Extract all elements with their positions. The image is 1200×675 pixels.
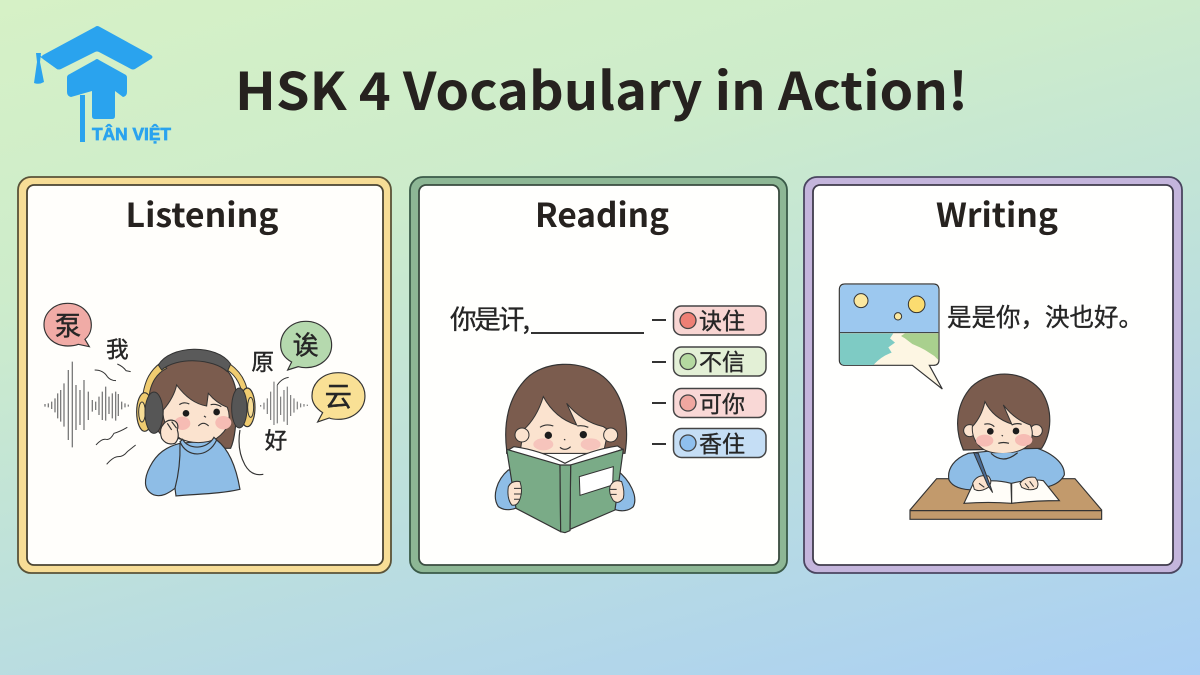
cheeks — [174, 417, 190, 430]
bubble: yellow — [312, 373, 365, 422]
ears — [515, 428, 529, 442]
panel: listening — [18, 177, 391, 573]
hands — [508, 481, 522, 505]
floating characters: 我 — [106, 332, 129, 365]
headphones — [143, 363, 248, 397]
sweater — [145, 440, 240, 496]
collar — [180, 437, 217, 454]
logo wordmark: TÂN VIỆT — [92, 123, 171, 144]
title: HSK 4 Vocabulary in Action! — [235, 50, 968, 125]
hair back — [148, 356, 237, 448]
sound wave right — [261, 382, 307, 425]
table — [910, 479, 1102, 519]
book label — [579, 467, 613, 495]
bubble: red — [44, 303, 91, 347]
option: red — [652, 302, 766, 336]
pen — [974, 453, 993, 493]
illustration: listening girl and sounds: 原 — [251, 344, 274, 377]
sound wave left — [45, 362, 128, 447]
face — [163, 385, 229, 443]
fill-in sentence: 你是讦, — [450, 298, 530, 337]
left hand — [973, 476, 991, 491]
illustration: listening girl and sounds: 泵 — [55, 304, 81, 343]
illustration: listening girl and sounds: 好 — [265, 423, 287, 456]
logo tassel — [34, 53, 44, 84]
illustration: listening girl and sounds: 诶 — [293, 325, 319, 362]
illustration: writing girl — [839, 284, 1102, 519]
face details — [533, 438, 553, 450]
hair — [506, 364, 627, 453]
thought picture bubble — [839, 284, 942, 389]
heading: Listening: Listening — [126, 189, 279, 237]
face — [972, 402, 1032, 454]
option: pink: 可你 — [699, 385, 745, 419]
option: blue — [652, 425, 766, 459]
face — [520, 397, 608, 453]
logo arrow — [67, 59, 127, 119]
option: red: 诀住 — [699, 302, 745, 336]
eyes and mouth — [183, 410, 189, 417]
logo stem — [80, 95, 85, 142]
hand — [160, 420, 178, 444]
collar — [991, 453, 1018, 459]
ears — [964, 425, 976, 437]
heading: Reading: Reading — [535, 189, 669, 237]
answer options — [652, 302, 766, 459]
notebook — [964, 480, 1059, 503]
logo graduation cap — [42, 26, 152, 70]
book — [508, 446, 623, 468]
sentence: 是是你，泱也好。 — [947, 298, 1143, 334]
cable — [239, 430, 263, 475]
arms — [495, 470, 635, 511]
illustration: listening girl and sounds: 云 — [325, 374, 352, 414]
logo: Tan Viet — [34, 26, 171, 144]
bubble: green — [281, 321, 332, 370]
option: blue: 香住 — [699, 425, 745, 459]
panel: writing — [804, 177, 1182, 573]
arm line — [175, 444, 180, 488]
sweater — [949, 447, 1064, 490]
heading: Writing: Writing — [936, 189, 1058, 237]
squiggles — [95, 364, 289, 464]
illustration: reading girl with book — [495, 364, 635, 533]
option: green: 不信 — [699, 343, 745, 377]
logo tassel string — [40, 56, 58, 69]
illustration: listening girl and sounds — [44, 303, 365, 496]
hair — [958, 374, 1050, 450]
face details — [976, 435, 993, 447]
option: green — [652, 343, 766, 377]
option: pink — [652, 385, 766, 419]
right hand — [1020, 477, 1038, 490]
panel: reading — [410, 177, 787, 573]
